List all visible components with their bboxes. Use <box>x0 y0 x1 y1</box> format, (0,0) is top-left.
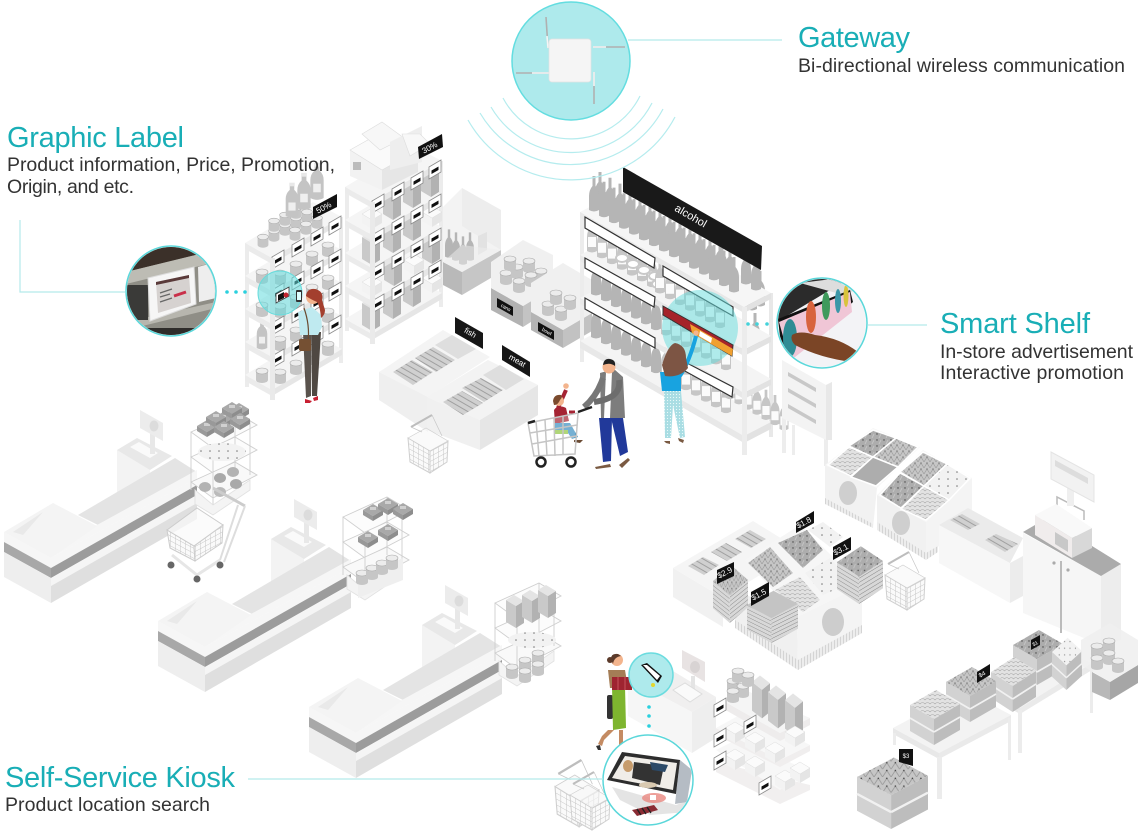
wire basket right <box>885 552 925 610</box>
panel: fish and meat freezers <box>379 317 538 450</box>
smart displays <box>585 217 733 397</box>
rack 1 with jars <box>245 163 343 400</box>
tag: rack 1 discount <box>313 194 337 219</box>
text: smart shelf description: Interactive promotion <box>940 362 1124 384</box>
glass bin with cans <box>491 240 553 327</box>
callout line smart shelf <box>868 324 927 326</box>
glass bin bottom right <box>1081 623 1138 700</box>
table 2 <box>998 655 1093 753</box>
crate on floor <box>857 749 928 829</box>
text: gateway description: Bi-directional wireless communication <box>798 55 1125 77</box>
glass bin with bowls <box>531 263 592 348</box>
icon: self-service kiosk <box>603 735 693 825</box>
checkout counter 3 <box>309 585 502 778</box>
tag small 2: $4 <box>978 671 987 679</box>
table 1 <box>893 690 1011 799</box>
dots from graphic label <box>225 290 247 294</box>
person: child in cart <box>553 383 583 443</box>
retail shelf by register <box>714 668 810 804</box>
person: woman touching shelf <box>660 330 699 444</box>
text: self-service kiosk description: Product location search <box>5 794 210 816</box>
produce table left <box>673 521 800 627</box>
tag: fish <box>455 317 483 349</box>
checkout counter 1 <box>4 410 197 603</box>
third shelf <box>580 260 771 399</box>
dots to kiosk <box>647 705 651 728</box>
smart shelf active display <box>663 306 733 356</box>
shopping cart empty <box>167 488 245 582</box>
register machine <box>1035 452 1094 558</box>
shelf rack by counter 1 <box>191 402 257 515</box>
rack 2 with boxes <box>345 122 443 344</box>
title: smart shelf: Smart Shelf <box>940 308 1091 340</box>
text: graphic label description: Origin, and etc. <box>7 176 134 198</box>
shelf rack by counter 2 <box>343 497 413 600</box>
text: smart shelf description: In-store advertisement <box>940 341 1134 363</box>
tag small 1: $1 <box>1032 640 1040 648</box>
freezer chest <box>939 508 1023 603</box>
callout line gateway <box>628 39 782 41</box>
tag small 1 <box>1031 635 1040 650</box>
price tags: $1.8 <box>795 515 813 530</box>
tag: bowls: bowl <box>541 327 552 337</box>
wire basket by kiosk <box>555 760 610 830</box>
produce bin big center <box>735 522 862 670</box>
tag small 2 <box>977 664 990 683</box>
tag: rack 2 discount <box>418 134 443 159</box>
top boxes <box>350 122 430 190</box>
bottom shelf <box>580 303 788 443</box>
person: man pushing cart <box>584 359 630 469</box>
price tags <box>716 511 851 606</box>
shelf rack by counter 3 <box>495 583 561 686</box>
narrow tiered shelf <box>782 360 832 466</box>
wire crates with produce <box>713 546 883 643</box>
shopping cart with child <box>528 407 592 466</box>
wire basket near freezer <box>408 415 448 473</box>
title: self-service kiosk: Self-Service Kiosk <box>5 762 236 794</box>
tag: rack 2 discount: 30% <box>421 140 439 156</box>
top shelf <box>580 172 771 313</box>
title: graphic label: Graphic Label <box>7 122 184 154</box>
gateway waves <box>468 96 675 180</box>
text: graphic label description: Product information, Price, Promotion, <box>7 154 335 176</box>
produce bins back left <box>825 428 920 528</box>
text: graphic label description <box>7 154 335 198</box>
text: smart shelf description <box>940 341 1134 384</box>
scanner circle <box>629 653 673 697</box>
alcohol sign <box>623 167 762 270</box>
tag: meat <box>502 345 530 377</box>
callout line self-service kiosk <box>248 778 603 780</box>
glass bin with bottles <box>443 188 501 295</box>
icon: electronic shelf label <box>126 246 216 338</box>
tag: fish: fish <box>463 326 478 340</box>
person: woman with phone <box>296 289 325 403</box>
icon: smart shelf touch <box>777 278 867 368</box>
price tags: $1.5 <box>750 587 768 602</box>
person: cashier customer <box>596 654 638 750</box>
title: gateway: Gateway <box>798 22 910 54</box>
tag floor crate: $3 <box>903 754 910 760</box>
alcohol sign: alcohol <box>672 202 709 230</box>
produce bins back right <box>877 450 972 560</box>
second shelf <box>580 219 771 356</box>
rack: alcohol shelf <box>580 167 788 455</box>
checkout counter 2 <box>158 499 351 692</box>
tag: meat: meat <box>507 352 528 370</box>
tables with crates <box>893 630 1093 799</box>
dots to smart shelf <box>746 322 769 326</box>
icon: gateway device <box>512 2 630 120</box>
price tags: $3.1 <box>832 542 850 557</box>
tag: cans: cans <box>499 303 512 314</box>
person register counter <box>628 650 716 753</box>
callout line graphic label <box>20 220 125 292</box>
cash register cabinet <box>1023 452 1121 645</box>
tag: rack 1 discount: 50% <box>315 200 333 216</box>
highlight circle on rack 1 <box>258 271 302 315</box>
price tags: $2.9 <box>716 565 734 580</box>
highlight circle on shelf <box>662 290 738 366</box>
